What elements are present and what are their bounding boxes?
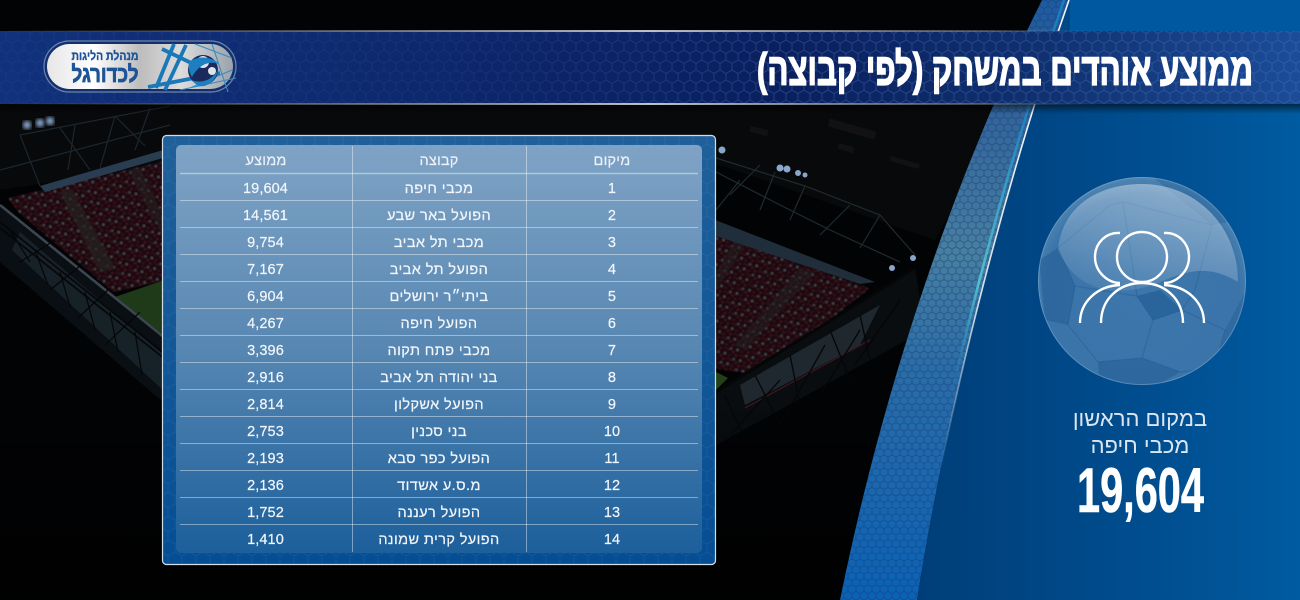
logo text bbox=[72, 49, 138, 87]
row 7: מכבי פתח תקוה bbox=[388, 343, 490, 359]
row 7: 3,396 bbox=[247, 343, 284, 359]
row 8: 2,916 bbox=[247, 370, 284, 386]
table header bbox=[245, 153, 630, 169]
row 14: הפועל קרית שמונה bbox=[378, 531, 500, 548]
right diagonal structure bbox=[716, 268, 925, 445]
row 6: הפועל חיפה bbox=[400, 315, 478, 332]
car park behind the stand bbox=[750, 119, 920, 169]
row 11 bbox=[247, 450, 620, 467]
table header: ממוצע bbox=[245, 153, 287, 169]
row 10: בני סכנין bbox=[411, 424, 467, 440]
row 1: 19,604 bbox=[243, 181, 288, 197]
logo net bbox=[148, 44, 236, 92]
right stand crowd bbox=[710, 232, 870, 375]
row 2 bbox=[243, 207, 616, 224]
left stand crowd bbox=[8, 160, 170, 292]
football badge with fans icon bbox=[1038, 172, 1246, 390]
row 6: 6 bbox=[608, 316, 616, 332]
caption line 2: מכבי חיפה bbox=[1091, 433, 1189, 458]
row 3 bbox=[247, 234, 616, 251]
row 1 bbox=[243, 181, 616, 197]
highlight lines on the curve bbox=[912, 0, 1069, 600]
row 4: 7,167 bbox=[247, 262, 284, 278]
table header: מיקום bbox=[594, 153, 630, 169]
row 4: הפועל תל אביב bbox=[390, 261, 488, 278]
row 7: 7 bbox=[608, 343, 616, 359]
row 12 bbox=[247, 478, 620, 494]
table header: קבוצה bbox=[419, 153, 459, 169]
row 6 bbox=[247, 315, 616, 332]
row 9: 9 bbox=[608, 397, 616, 413]
logo: league administration bbox=[44, 41, 236, 92]
row 13: הפועל רעננה bbox=[397, 504, 481, 521]
first place caption bbox=[1073, 406, 1207, 526]
row 14: 1,410 bbox=[247, 532, 284, 548]
row 10: 2,753 bbox=[247, 424, 284, 440]
row 9: 2,814 bbox=[247, 397, 284, 413]
logo text: לכדורגל bbox=[72, 61, 138, 87]
ball panels bbox=[1039, 172, 1246, 390]
row 13: 13 bbox=[604, 505, 620, 521]
row 8: בני יהודה תל אביב bbox=[380, 369, 498, 386]
row 11: 11 bbox=[604, 451, 620, 467]
row 5 bbox=[247, 288, 616, 305]
row 9 bbox=[247, 396, 616, 413]
left diagonal structure bbox=[0, 205, 170, 408]
row 2: 2 bbox=[608, 208, 616, 224]
caption line 1: במקום הראשון bbox=[1073, 406, 1207, 431]
row 14: 14 bbox=[604, 532, 620, 548]
table inner area bbox=[176, 145, 702, 553]
row 8: 8 bbox=[608, 370, 616, 386]
blue panel body bbox=[917, 0, 1300, 600]
ball gloss bbox=[1058, 184, 1238, 291]
table panel bbox=[162, 136, 716, 564]
row 6: 4,267 bbox=[247, 316, 284, 332]
row 2: הפועל באר שבע bbox=[387, 207, 491, 224]
row 3: מכבי תל אביב bbox=[394, 234, 484, 251]
first place value: 19,604 bbox=[1077, 456, 1204, 526]
row 7 bbox=[247, 343, 616, 359]
row 1: מכבי חיפה bbox=[405, 181, 473, 197]
row 10: 10 bbox=[604, 424, 620, 440]
right blue curved panel bbox=[840, 0, 1300, 600]
row 9: הפועל אשקלון bbox=[394, 396, 484, 413]
right roof and truss bbox=[710, 146, 916, 284]
row 11: הפועל כפר סבא bbox=[388, 450, 490, 467]
logo text: מנהלת הליגות bbox=[72, 49, 138, 63]
row 14 bbox=[247, 531, 620, 548]
row 12: 2,136 bbox=[247, 478, 284, 494]
row 5: 5 bbox=[608, 289, 616, 305]
row 3: 9,754 bbox=[247, 235, 284, 251]
header band bbox=[0, 30, 1300, 114]
row 4: 4 bbox=[608, 262, 616, 278]
row 1: 1 bbox=[608, 181, 616, 197]
icon: three fans bbox=[1080, 232, 1204, 323]
row 12: מ.ס.ע אשדוד bbox=[397, 478, 481, 494]
left pitch bbox=[112, 278, 170, 335]
right pitch sliver bbox=[716, 372, 728, 390]
row 5: 6,904 bbox=[247, 289, 284, 305]
honeycomb curved band bbox=[840, 0, 1069, 600]
row 12: 12 bbox=[604, 478, 620, 494]
logo ball bbox=[188, 55, 219, 86]
row 8 bbox=[247, 369, 616, 386]
row 11: 2,193 bbox=[247, 451, 284, 467]
row 13 bbox=[247, 504, 620, 521]
row 2: 14,561 bbox=[243, 208, 288, 224]
row 13: 1,752 bbox=[247, 505, 284, 521]
row 3: 3 bbox=[608, 235, 616, 251]
row 4 bbox=[247, 261, 616, 278]
row 5: ביתי״ר ירושלים bbox=[390, 288, 488, 305]
row 10 bbox=[247, 424, 620, 440]
left roof and truss bbox=[0, 106, 170, 192]
